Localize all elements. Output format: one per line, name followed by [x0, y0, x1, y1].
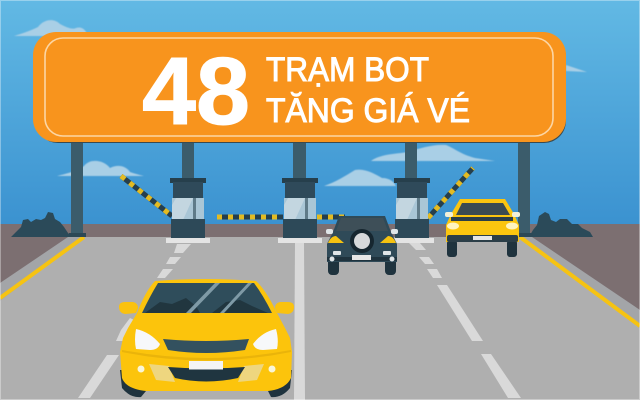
car: dark SUV: [326, 216, 398, 275]
car: yellow distant: [445, 199, 520, 257]
ground: [0, 224, 640, 400]
road surface: [0, 237, 640, 400]
sign board: [33, 32, 566, 145]
toll booth right: [390, 178, 434, 243]
lane markings: [78, 243, 521, 400]
gantry posts: [69, 140, 533, 237]
headline number: 48: [142, 38, 250, 145]
headline text: [266, 51, 470, 130]
road shoulder: [0, 237, 640, 400]
toll booth left: [166, 178, 210, 243]
bushes: [11, 212, 593, 237]
car: yellow foreground: [119, 279, 294, 397]
headline text: TĂNG GIÁ VÉ: [266, 92, 470, 130]
barrier arms: [121, 168, 473, 218]
toll booth centre: [278, 178, 322, 243]
clouds: [14, 20, 587, 186]
sky: [0, 0, 640, 225]
headline text: TRẠM BOT: [266, 51, 429, 89]
yellow edge lines: [0, 237, 640, 326]
